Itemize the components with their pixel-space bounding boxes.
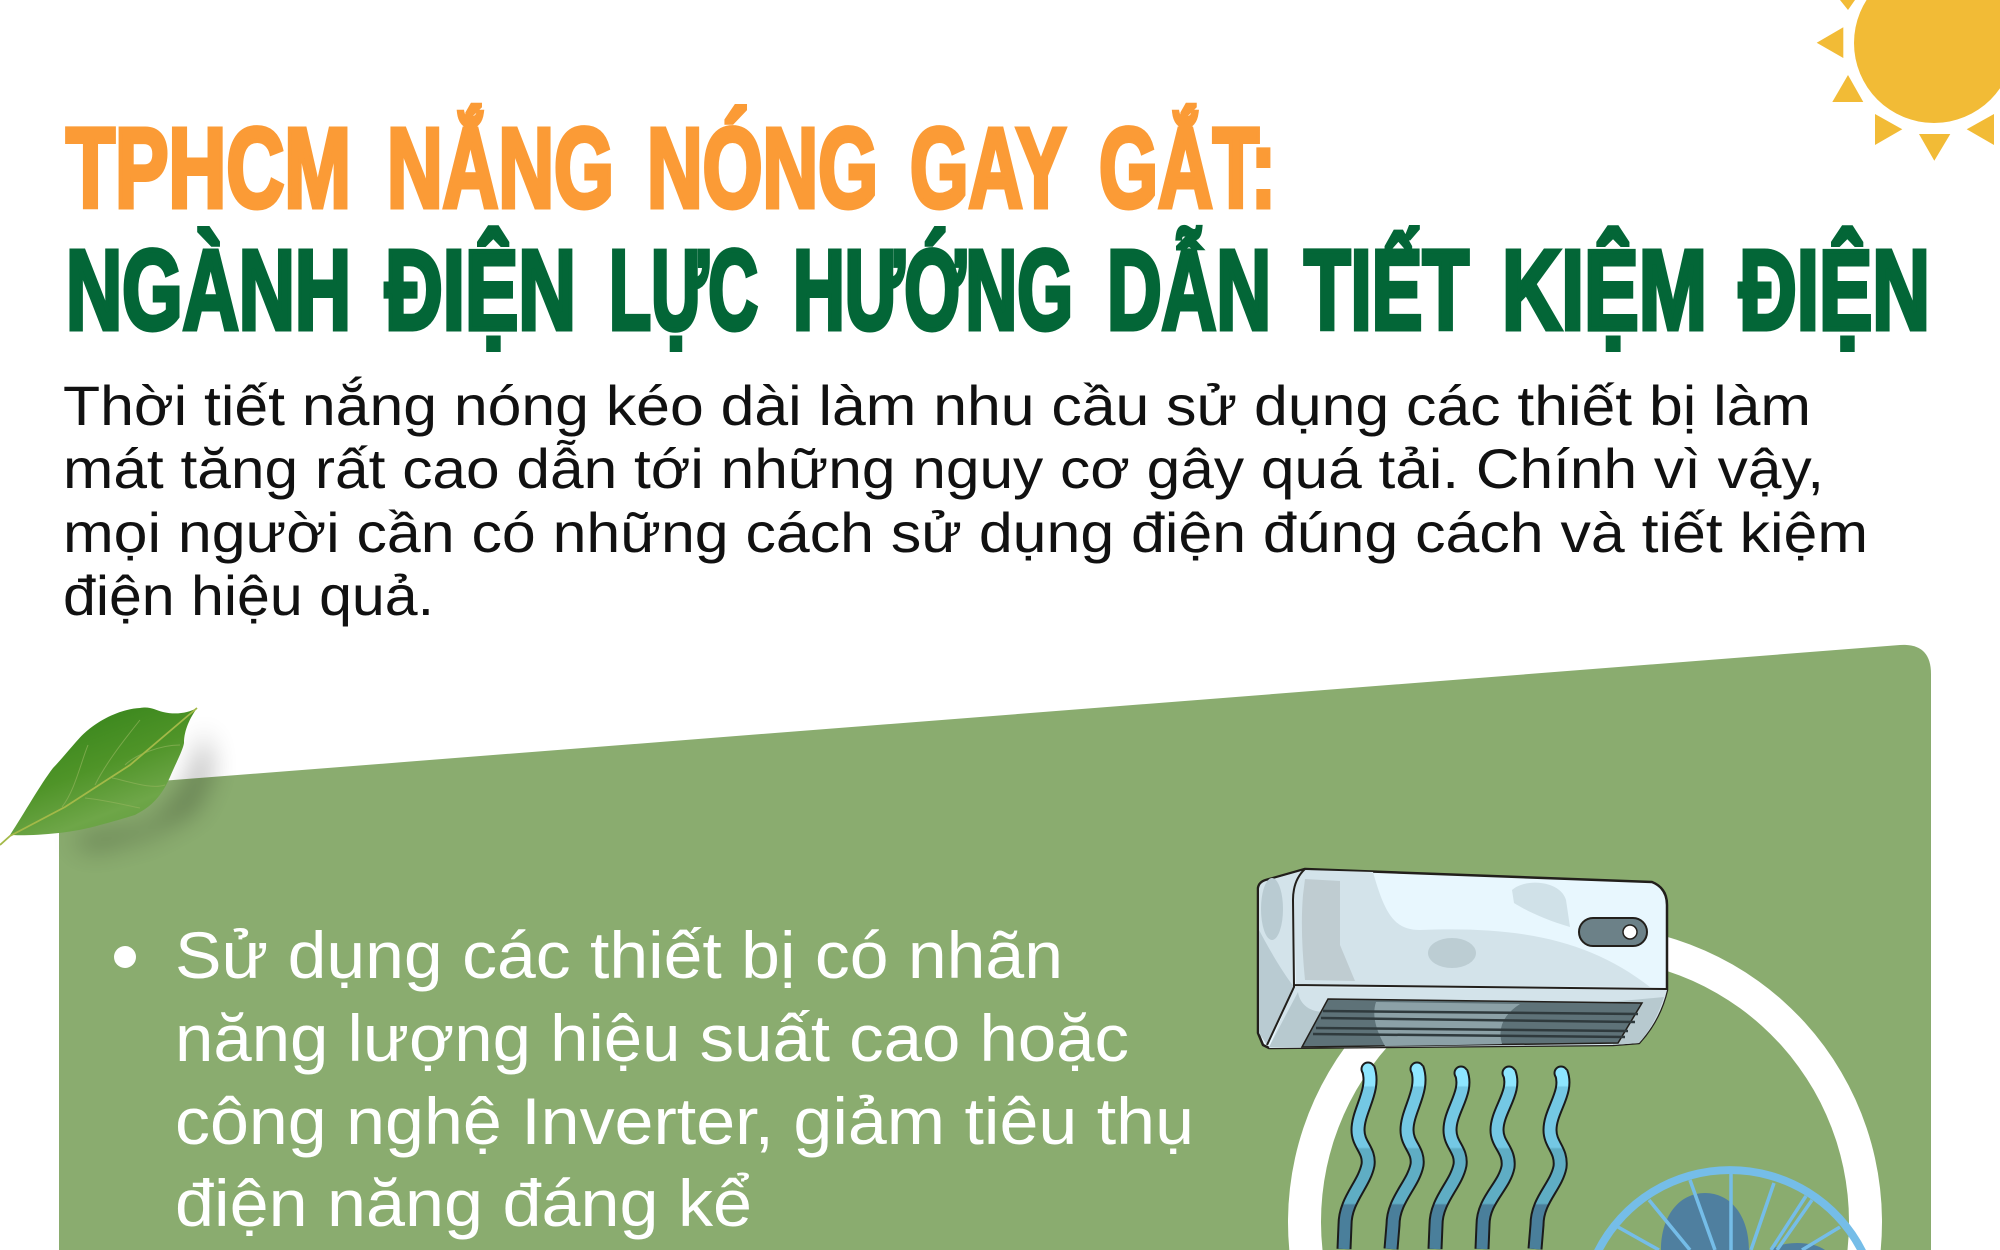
bullet point: năng lượng hiệu suất cao hoặc <box>175 1001 1129 1075</box>
fan guard rim <box>1594 1166 1866 1250</box>
vent slats <box>1313 1011 1638 1037</box>
leaf stem and midrib <box>0 708 197 845</box>
unit body <box>1258 869 1667 1048</box>
vent grille <box>1302 999 1642 1047</box>
title line 1: GAY <box>910 105 1066 231</box>
title line 1: GẮT: <box>1099 105 1276 231</box>
bullet point: công nghệ Inverter, giảm tiêu thụ <box>175 1084 1194 1158</box>
title line 1 <box>66 105 1276 231</box>
leaf blade <box>10 707 197 835</box>
title <box>66 105 1930 353</box>
intro text block: mát tăng rất cao dẫn tới những nguy cơ gây quá tải. Chính vì vậy, <box>63 437 1824 500</box>
lower body <box>1269 987 1667 1048</box>
title line 2: TIẾT <box>1304 227 1469 353</box>
title line 2: NGÀNH <box>66 227 351 353</box>
fan blades <box>1661 1193 1825 1250</box>
bullet point: Sử dụng các thiết bị có nhãn <box>175 918 1063 992</box>
title line 2: HƯỚNG <box>793 227 1073 353</box>
title line 2: LỰC <box>609 227 758 353</box>
control knob <box>1579 918 1647 946</box>
side panel <box>1259 870 1305 1045</box>
intro text block: điện hiệu quả. <box>63 564 434 627</box>
bullet point: điện năng đáng kể <box>175 1166 752 1240</box>
title line 1: NẮNG <box>387 105 614 231</box>
side and front shadows <box>1261 878 1283 940</box>
title line 2: ĐIỆN <box>385 227 576 353</box>
leaf shadow <box>70 730 212 850</box>
intro text block: mọi người cần có những cách sử dụng điện đúng cách và tiết kiệm <box>63 501 1868 564</box>
icon: cold air waves <box>1344 1062 1568 1249</box>
dividing lines <box>1267 869 1667 1045</box>
icon: air conditioner <box>1258 869 1667 1048</box>
title line 2 <box>66 227 1930 353</box>
bullet point <box>114 918 1194 1240</box>
fan guard spokes <box>1618 1168 1840 1250</box>
icon: sun <box>1817 0 2000 161</box>
title line 1: TPHCM <box>66 105 351 231</box>
title line 1: NÓNG <box>647 105 878 231</box>
icon: leaf <box>0 707 212 850</box>
white ring <box>1288 925 1882 1250</box>
intro text block <box>63 374 1868 627</box>
icon: fan <box>1594 1166 1866 1250</box>
intro text block: Thời tiết nắng nóng kéo dài làm nhu cầu sử dụng các thiết bị làm <box>63 374 1811 437</box>
front shading <box>1294 870 1650 987</box>
bullet dot <box>114 946 136 968</box>
title line 2: DẪN <box>1107 227 1271 353</box>
title line 2: KIỆM <box>1502 227 1707 353</box>
leaf veins <box>62 720 180 808</box>
panel: green background <box>59 645 1931 1250</box>
knob light <box>1623 925 1637 939</box>
